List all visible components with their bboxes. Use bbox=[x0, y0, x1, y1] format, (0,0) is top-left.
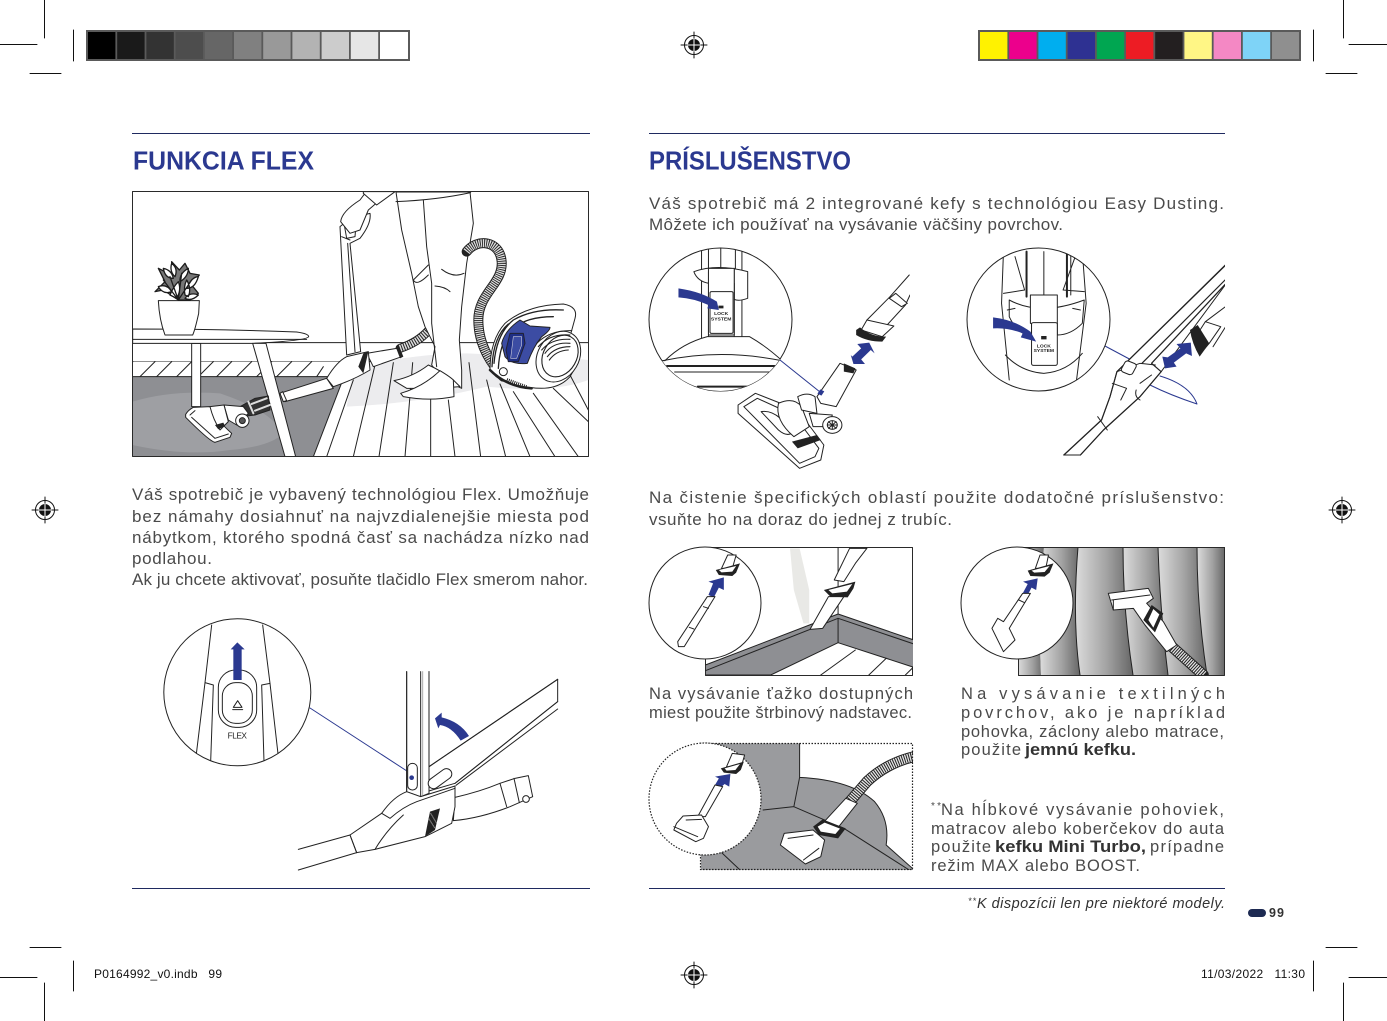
arm bbox=[341, 193, 380, 233]
inset circle: lock: SYSTEM bbox=[711, 317, 732, 321]
floor nozzle with connecting hose bbox=[738, 275, 910, 468]
text block: Flex description: Ak ju chcete aktivovať, posuňte tlačidlo Flex smerom nahor. bbox=[132, 570, 588, 589]
inset circle: lock bbox=[649, 247, 792, 393]
note: mini turbo: ** bbox=[931, 801, 941, 812]
illustration: mini turbo brush on seat bbox=[649, 743, 915, 871]
text block: Flex description: nábytkom, ktorého spodná časť sa nachádza nízko nad bbox=[132, 528, 589, 547]
double arrow bbox=[1162, 343, 1192, 368]
note: mini turbo bbox=[931, 800, 1225, 875]
inset circle: soft brush bbox=[961, 547, 1073, 659]
page number bbox=[1248, 906, 1284, 920]
footnote: ** bbox=[968, 896, 976, 906]
note: mini turbo: Na hĺbkové vysávanie pohoviek, bbox=[941, 800, 1224, 819]
grayscale colour bar bbox=[86, 30, 410, 61]
inset circle: lock on wand bbox=[967, 248, 1110, 391]
note: mini turbo: režim MAX alebo BOOST. bbox=[931, 857, 1140, 875]
text block: accessories intro: Váš spotrebič má 2 integrované kefy s technológiou Easy Dusting. bbox=[649, 194, 1224, 213]
caption: soft brush: použite bbox=[961, 741, 1021, 759]
text block: Flex description bbox=[132, 485, 589, 589]
caption: crevice tool: Na vysávanie ťažko dostupných bbox=[649, 685, 913, 703]
text block: Flex description: bez námahy dosiahnuť na najvzdialenejšie miesta pod bbox=[132, 507, 589, 526]
hose to body bbox=[400, 331, 428, 348]
heading: Príslušenstvo: PRÍSLUŠENSTVO bbox=[649, 146, 851, 176]
wand with hose collar bbox=[1064, 263, 1228, 455]
note: mini turbo: použite bbox=[931, 838, 991, 856]
inset circle: mini turbo bbox=[649, 743, 761, 855]
inset circle: lock on wand: SYSTEM bbox=[1034, 348, 1054, 353]
registration mark: bottom bbox=[681, 962, 707, 988]
tube and nozzle bbox=[280, 378, 333, 402]
illustration: wand lock system bbox=[967, 248, 1228, 455]
illustration: vacuuming under a table bbox=[132, 192, 590, 457]
text block: additional accessories bbox=[649, 488, 1224, 529]
inset circle: lock: LOCK bbox=[714, 311, 729, 316]
inset circle: flex button: FLEX bbox=[228, 731, 247, 741]
caption: soft brush: Na vysávanie textilných bbox=[961, 685, 1225, 703]
registration mark: right bbox=[1329, 497, 1355, 523]
registration mark: left bbox=[32, 497, 58, 523]
flex body bbox=[327, 352, 370, 387]
cylinder hose bbox=[467, 243, 503, 377]
plant bbox=[158, 301, 199, 335]
connector line bbox=[780, 360, 820, 392]
heading: Funkcia Flex: FUNKCIA FLEX bbox=[133, 146, 315, 176]
table bbox=[192, 343, 201, 407]
text block: additional accessories: Na čistenie špecifických oblastí použite dodatočné príslušenstvo: bbox=[649, 488, 1224, 507]
caption: soft brush bbox=[961, 685, 1225, 759]
inset circle: lock on wand: LOCK bbox=[1037, 344, 1052, 348]
text block: accessories intro: Môžete ich používať na vysávanie väčšiny povrchov. bbox=[649, 215, 1063, 234]
caption: crevice tool bbox=[649, 685, 913, 722]
note: mini turbo: prípadne bbox=[1150, 838, 1224, 856]
illustration: soft brush on curtain bbox=[961, 547, 1225, 676]
illustration: floor nozzle lock system bbox=[649, 247, 910, 468]
double arrow bbox=[851, 343, 875, 364]
connector line bbox=[310, 708, 410, 773]
caption: crevice tool: miest použite štrbinový nadstavec. bbox=[649, 704, 912, 722]
illustration: crevice tool bbox=[649, 547, 914, 676]
footnote: K dispozícii len pre niektoré modely. bbox=[977, 896, 1225, 912]
caption: soft brush: jemnú kefku. bbox=[1024, 741, 1136, 759]
registration mark: top bbox=[681, 32, 707, 58]
text block: Flex description: Váš spotrebič je vybavený technológiou Flex. Umožňuje bbox=[132, 485, 589, 504]
arrow: flex movement bbox=[435, 713, 469, 741]
canister vacuum bbox=[490, 304, 590, 390]
page number: 99 bbox=[1269, 906, 1284, 920]
note: mini turbo: kefku Mini Turbo, bbox=[995, 838, 1146, 856]
print slug right: 11/03/2022 11:30 bbox=[1201, 967, 1305, 981]
inset circle: crevice bbox=[649, 547, 761, 659]
person bbox=[396, 192, 473, 388]
text block: Flex description: podlahou. bbox=[132, 549, 212, 568]
text block: additional accessories: vsuňte ho na doraz do jednej z trubíc. bbox=[649, 510, 952, 529]
colour bar bbox=[978, 30, 1301, 61]
caption: soft brush: pohovka, záclony alebo matrace, bbox=[961, 723, 1224, 741]
text block: accessories intro bbox=[649, 194, 1224, 234]
caption: soft brush: povrchov, ako je napríklad bbox=[961, 704, 1225, 722]
inset circle: flex button bbox=[164, 619, 311, 766]
print slug left: P0164992_v0.indb 99 bbox=[94, 967, 222, 981]
wand with flex joint bbox=[298, 672, 558, 870]
wand bbox=[340, 213, 370, 355]
illustration: flex button detail bbox=[164, 619, 558, 870]
note: mini turbo: matracov alebo koberčekov do auta bbox=[931, 820, 1225, 838]
connector line bbox=[1105, 346, 1197, 404]
